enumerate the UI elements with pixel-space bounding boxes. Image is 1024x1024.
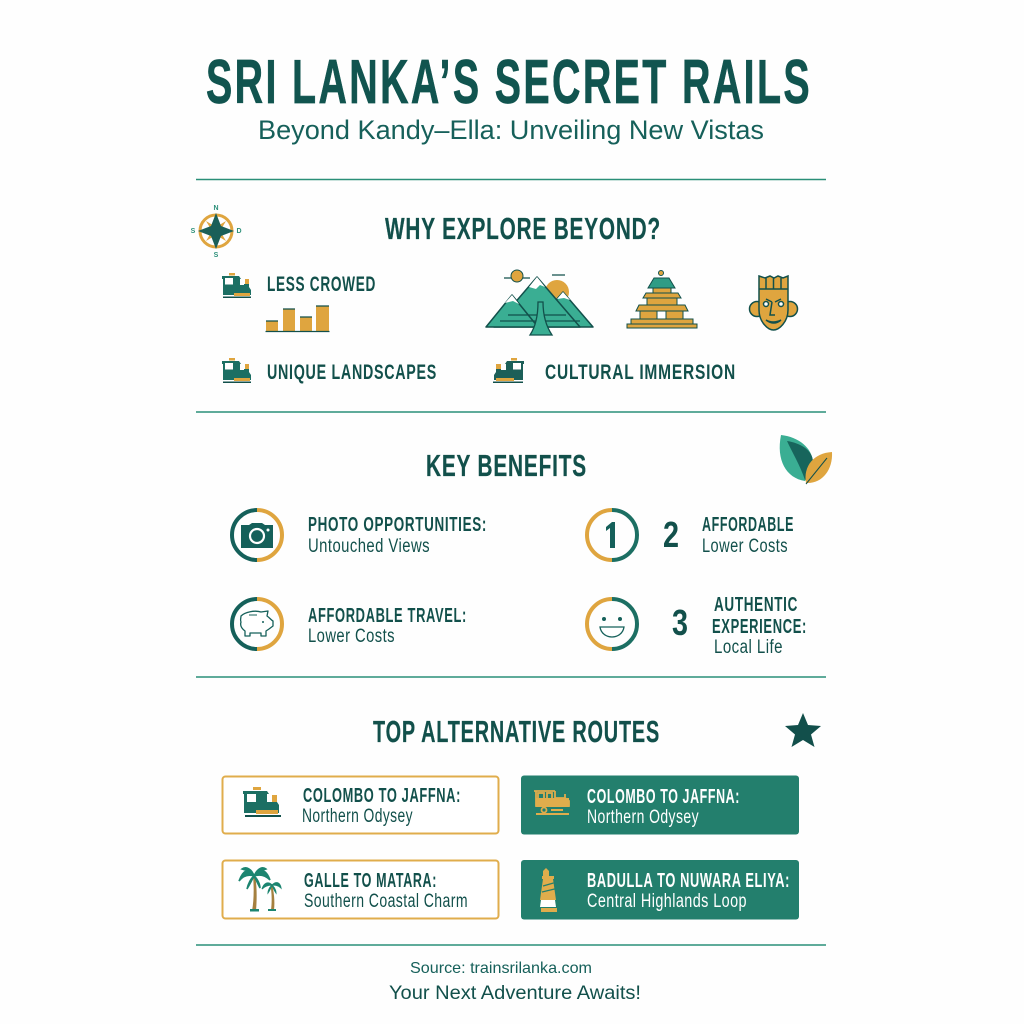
text: photo opportunities: Untouched Views [308,536,430,557]
icon: lighthouse [540,868,557,912]
closing line: Your Next Adventure Awaits! [389,982,641,1004]
icon: mask [750,276,798,330]
icon: mountains [486,270,593,335]
text: affordable travel [308,605,467,647]
icon: leaves [780,435,832,484]
icon: compass: S [191,228,196,235]
text: photo opportunities: PHOTO OPPORTUNITIES: [308,514,487,536]
card: badulla to nuwara eliya: Central Highlands Loop [587,891,747,912]
icon: piggy bank in ring [232,599,282,649]
source line: Source: trainsrilanka.com [410,960,592,977]
text: affordable: Lower Costs [702,536,788,557]
card: badulla to nuwara eliya [521,860,799,920]
text: affordable [702,514,794,557]
text: affordable travel: Lower Costs [308,626,395,647]
card: galle to matara: GALLE TO MATARA: [304,870,437,892]
icon: gold train [534,791,569,814]
panel: top alternative routes [222,713,821,920]
icon: number one in ring [587,510,637,560]
label: less crowed: LESS CROWED [267,273,376,296]
icon: compass: D [236,228,242,235]
card: galle to matara [222,860,498,918]
label: cultural immersion: CULTURAL IMMERSION [545,361,736,384]
heading: top alternative routes: TOP ALTERNATIVE ROUTES [373,714,660,749]
heading: why explore beyond: WHY EXPLORE BEYOND? [385,211,661,246]
card: colombo to jaffna, light: Northern Odysey [302,806,413,827]
text: authentic experience: EXPERIENCE: [712,616,807,638]
number two: 2 [663,514,679,555]
text: affordable: AFFORDABLE [702,514,794,536]
heading: key benefits: KEY BENEFITS [426,448,587,483]
icon: smiley in ring [587,599,637,649]
card: colombo to jaffna, dark: Northern Odysey [587,807,699,828]
icon: compass [191,205,242,259]
icon: palm trees [239,868,281,912]
icon: train [243,787,281,817]
card: colombo to jaffna, dark [521,776,799,834]
text: affordable travel: AFFORDABLE TRAVEL: [308,605,467,627]
icon: train, unique landscapes [222,358,251,383]
icon: train, cultural immersion [493,358,524,383]
text: authentic experience [712,594,807,658]
card: badulla to nuwara eliya: BADULLA TO NUWARA ELIYA: [587,870,790,892]
card: colombo to jaffna, light: COLOMBO TO JAFFNA: [303,785,461,807]
icon: star [785,713,821,747]
icon: compass: N [213,205,219,212]
text: authentic experience: Local Life [714,637,783,658]
icon: compass: S [214,252,219,259]
icon: camera in ring [232,510,282,560]
icon: train, less crowded [222,273,251,298]
icon: temple [627,270,697,328]
card: colombo to jaffna, light [222,776,498,834]
text: authentic experience: AUTHENTIC [714,594,798,616]
panel: why explore beyond [191,205,798,384]
panel: key benefits [232,435,832,658]
label: unique landscapes: UNIQUE LANDSCAPES [267,361,437,384]
text: photo opportunities [308,514,487,557]
bar chart [266,306,330,332]
card: colombo to jaffna, dark: COLOMBO TO JAFFNA: [587,786,740,808]
number three: 3 [672,602,688,643]
card: galle to matara: Southern Coastal Charm [304,891,468,912]
subtitle: Beyond Kandy–Ella: Unveiling New Vistas [258,115,764,145]
